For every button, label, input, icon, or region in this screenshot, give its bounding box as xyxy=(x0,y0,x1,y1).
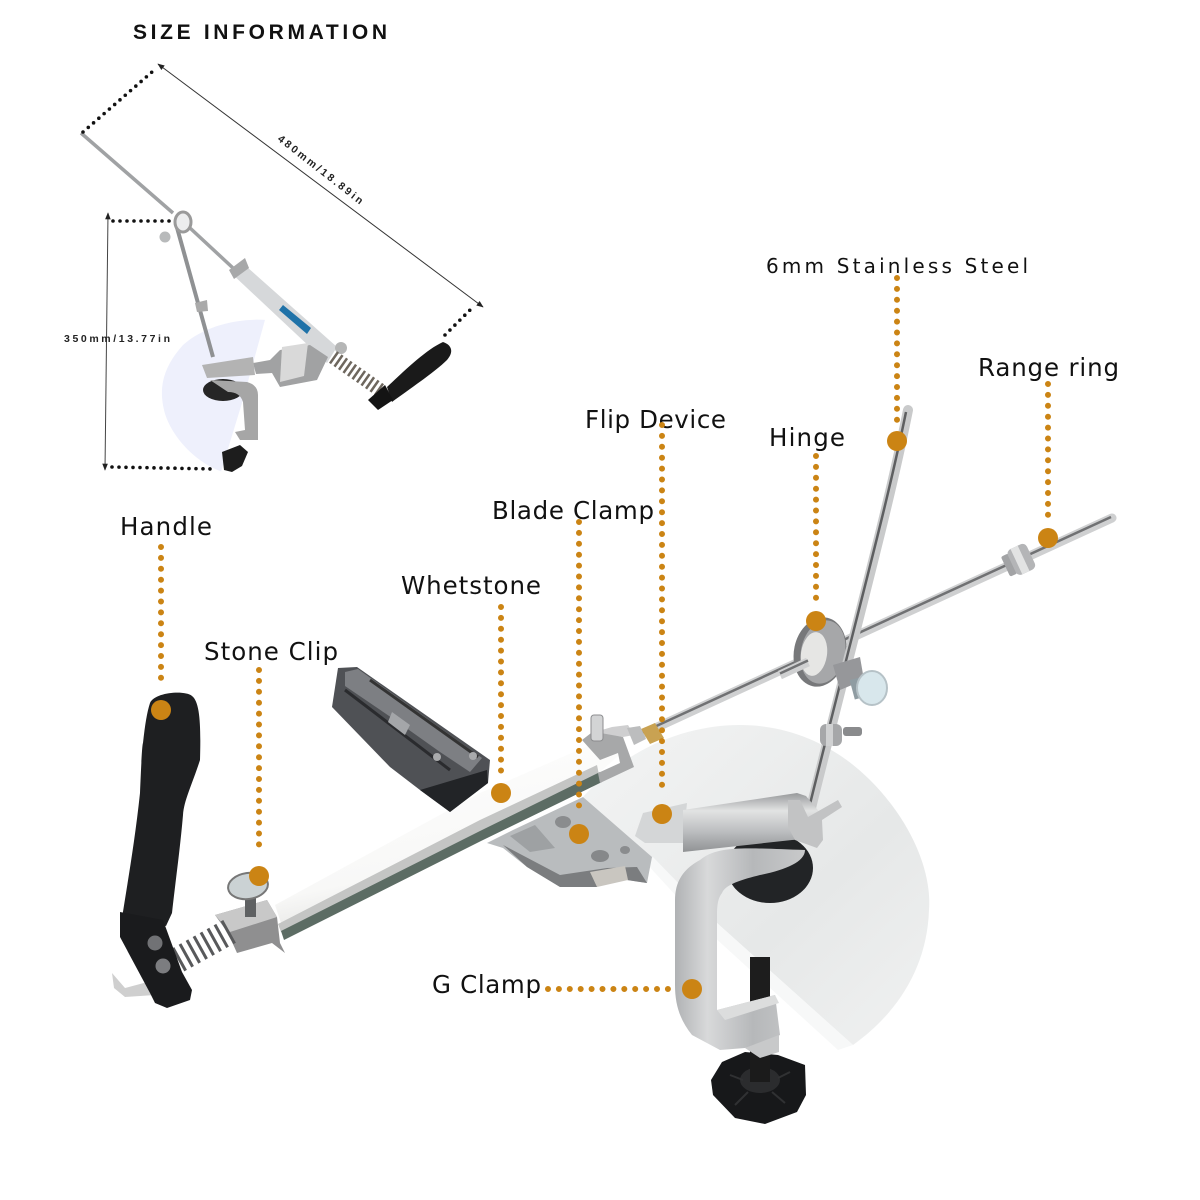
rod bracket xyxy=(820,724,862,746)
brass collar xyxy=(641,723,664,744)
callout: blade clamp: Blade Clamp xyxy=(492,496,654,525)
callout: g clamp xyxy=(432,970,702,999)
callout: 6mm stainless steel xyxy=(766,254,1028,451)
wing nut xyxy=(788,800,842,848)
panel: size diagram inset xyxy=(64,64,483,472)
blade clamp xyxy=(487,797,652,887)
range ring collar xyxy=(1000,542,1037,579)
arm end bracket xyxy=(582,715,646,783)
inset table edge xyxy=(223,320,267,472)
inset g clamp xyxy=(210,380,258,440)
callout: stone clip: Stone Clip xyxy=(204,637,338,666)
inset blade clamp xyxy=(253,343,328,387)
stone clip thumb screw xyxy=(226,870,270,917)
callout: handle xyxy=(120,512,212,720)
thumb bolt xyxy=(833,657,887,705)
callout: g clamp: G Clamp xyxy=(432,970,541,999)
inset spring xyxy=(333,357,380,390)
callout: hinge xyxy=(769,423,845,631)
long rod xyxy=(640,517,1112,735)
inset width dimension arrow xyxy=(158,64,483,307)
whetstone white arm xyxy=(275,745,625,940)
callout: handle: Handle xyxy=(120,512,212,541)
inset clamp body xyxy=(202,357,255,378)
clamp arm xyxy=(635,803,687,843)
inset hinge ring xyxy=(160,212,208,312)
inset dotted guides xyxy=(83,72,472,469)
callout: range ring: Range ring xyxy=(978,353,1119,382)
table sector xyxy=(583,725,929,1050)
inset support rod xyxy=(176,224,213,357)
inset handle xyxy=(368,342,451,410)
whetstone end block xyxy=(215,900,285,953)
callout: blade clamp xyxy=(492,496,654,844)
width measurement: 480mm/18.89in xyxy=(275,133,365,207)
inset height dimension arrow xyxy=(105,213,108,470)
callout: range ring xyxy=(978,353,1119,548)
handle head xyxy=(120,912,192,1008)
hinge rod stub xyxy=(780,660,808,675)
callout: 6mm stainless steel: 6mm Stainless Steel xyxy=(766,254,1028,278)
inset whetstone arm xyxy=(229,258,347,363)
clamp cylinder xyxy=(683,793,822,852)
callout: hinge: Hinge xyxy=(769,423,845,452)
callout: stone clip xyxy=(204,637,338,886)
callout: whetstone: Whetstone xyxy=(401,571,541,600)
callout: flip device: Flip Device xyxy=(585,405,726,434)
end tab xyxy=(112,973,155,997)
threaded screw upper xyxy=(750,957,770,1025)
clamp knob xyxy=(711,1050,806,1124)
inset long rod xyxy=(81,133,233,268)
callout: whetstone xyxy=(401,571,541,803)
hinge ring xyxy=(787,612,853,692)
callout: flip device xyxy=(585,405,726,824)
upright rod xyxy=(808,410,908,812)
multi-tool xyxy=(332,667,490,812)
inset table sector xyxy=(162,320,267,472)
threaded screw lower xyxy=(750,1040,770,1100)
title: SIZE INFORMATION xyxy=(133,21,387,44)
rubber pad xyxy=(727,833,813,903)
inset clamp pad xyxy=(203,379,243,401)
black handle xyxy=(122,693,200,926)
height measurement: 350mm/13.77in xyxy=(64,333,170,345)
inset clamp knob xyxy=(222,445,248,472)
spring xyxy=(178,930,232,960)
g clamp xyxy=(675,848,805,1058)
panel: sharpener product xyxy=(112,410,1112,1124)
